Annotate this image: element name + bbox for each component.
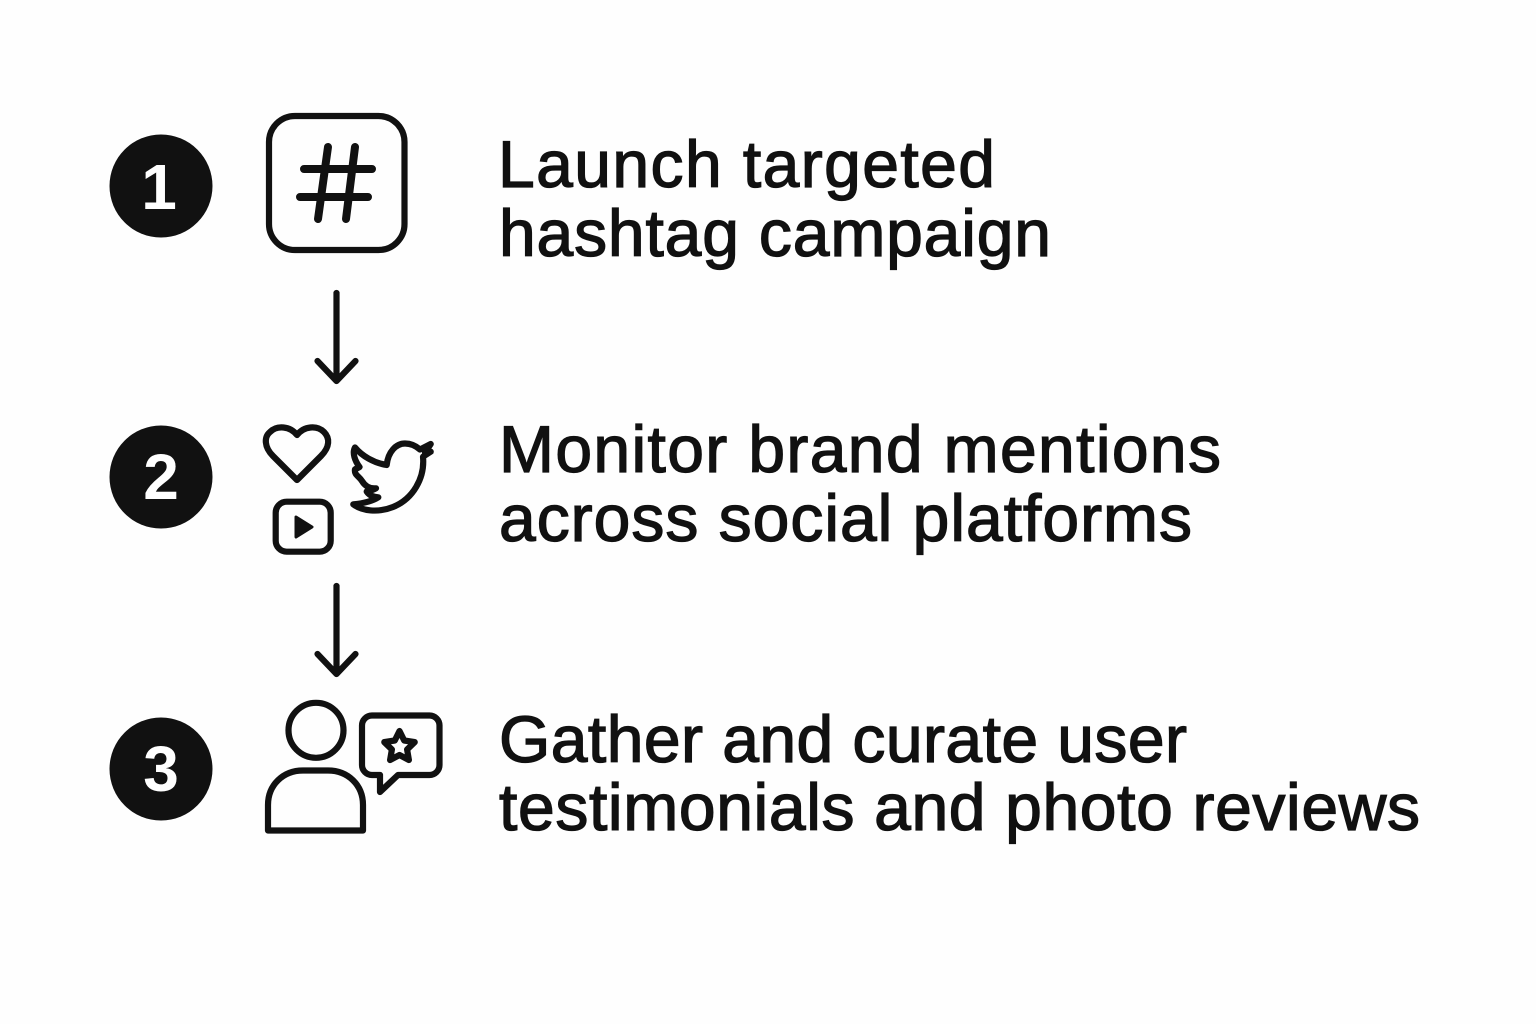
arrow: step 2 to step 3	[318, 586, 356, 674]
step 2 text	[499, 412, 1221, 555]
icon: social platforms	[266, 427, 431, 552]
step 3 text: testimonials and photo reviews	[499, 770, 1420, 844]
step 1 number badge	[110, 134, 212, 238]
step 3 text	[499, 702, 1420, 844]
icon: video play	[276, 502, 331, 552]
arrow: step 1 to step 2	[318, 293, 356, 381]
step 2 text: across social platforms	[499, 481, 1192, 555]
step 2 text: Monitor brand mentions	[499, 412, 1221, 486]
icon: bird	[353, 444, 431, 511]
icon: user with star review bubble	[268, 703, 440, 830]
step 1 text: hashtag campaign	[499, 196, 1051, 270]
step 1 text: Launch targeted	[498, 127, 995, 201]
step 1 number badge: 1	[141, 151, 177, 223]
step 3 text: Gather and curate user	[499, 702, 1187, 776]
icon: heart	[266, 427, 328, 480]
step 2 number badge	[110, 426, 212, 528]
step 2 number badge: 2	[143, 441, 179, 513]
step 1 text	[498, 127, 1051, 270]
step 3 number badge: 3	[143, 733, 179, 805]
icon: hashtag in rounded square	[269, 116, 404, 250]
step 3 number badge	[110, 718, 212, 820]
